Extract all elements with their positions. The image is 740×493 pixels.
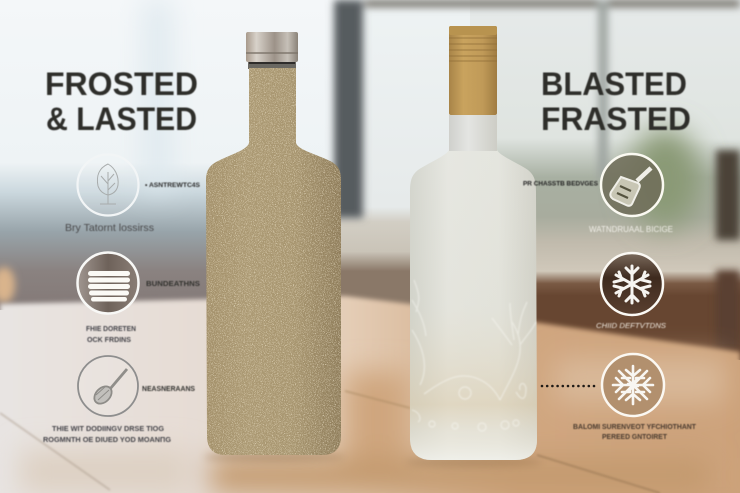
label: NEASNERAANS bbox=[142, 386, 195, 393]
heading: right bbox=[541, 66, 691, 137]
caption: ROGMNTH OE DIUED YOD MOANΠG bbox=[43, 437, 172, 444]
icon: stacked plates bbox=[78, 252, 138, 314]
textured body bbox=[205, 66, 343, 456]
caption: FHIE DORETEN bbox=[86, 326, 136, 333]
caption: BALOMI SURENVEOT YFCHIOTHANT bbox=[573, 424, 697, 431]
caption bbox=[43, 426, 172, 444]
heading: left: FROSTED bbox=[45, 66, 198, 102]
icon: tree bbox=[78, 154, 138, 216]
gold cap bbox=[449, 26, 497, 115]
left feature 3 bbox=[43, 356, 195, 444]
label: • ASNTREWTC4S bbox=[145, 182, 201, 189]
right feature 1 bbox=[523, 154, 673, 234]
caption: Bry Tatornt lossirss bbox=[65, 222, 154, 234]
left feature 2 bbox=[78, 252, 200, 344]
label: PR CHASSTB BEDVGES bbox=[523, 180, 599, 188]
silver screw cap bbox=[246, 32, 298, 69]
etched floral pattern bbox=[412, 280, 536, 431]
caption bbox=[86, 326, 136, 344]
caption: PEREED GNTOIRET bbox=[602, 434, 668, 441]
icon: whisk bbox=[78, 356, 138, 416]
left feature 1 bbox=[65, 154, 201, 234]
left bottle: textured sand finish bbox=[205, 32, 343, 456]
dotted leader bbox=[542, 385, 598, 387]
caption: WATNDRUAAL BICIGE bbox=[589, 225, 673, 234]
heading: left: & LASTED bbox=[46, 101, 197, 137]
caption: CHIID DEFTVTDNS bbox=[596, 321, 666, 330]
caption: THIE WIT DODIINGV DRSE TIOG bbox=[52, 426, 165, 433]
caption: OCK FRDINS bbox=[87, 337, 131, 344]
heading: left bbox=[45, 66, 198, 137]
wooden table bbox=[0, 296, 740, 493]
icon: snowflake bbox=[601, 253, 663, 315]
icon: frost crystal bbox=[602, 354, 664, 416]
bottle shadows bbox=[204, 452, 542, 467]
right feature 3 bbox=[542, 354, 697, 441]
caption bbox=[573, 424, 697, 441]
frosted body bbox=[410, 115, 537, 460]
right feature 2 bbox=[596, 253, 666, 330]
heading: right: FRASTED bbox=[541, 101, 691, 137]
heading: right: BLASTED bbox=[541, 66, 687, 102]
label: BUNDEATHNS bbox=[146, 279, 200, 288]
right bottle: frosted glass bbox=[410, 26, 537, 460]
icon: guitar tag bbox=[601, 154, 663, 216]
